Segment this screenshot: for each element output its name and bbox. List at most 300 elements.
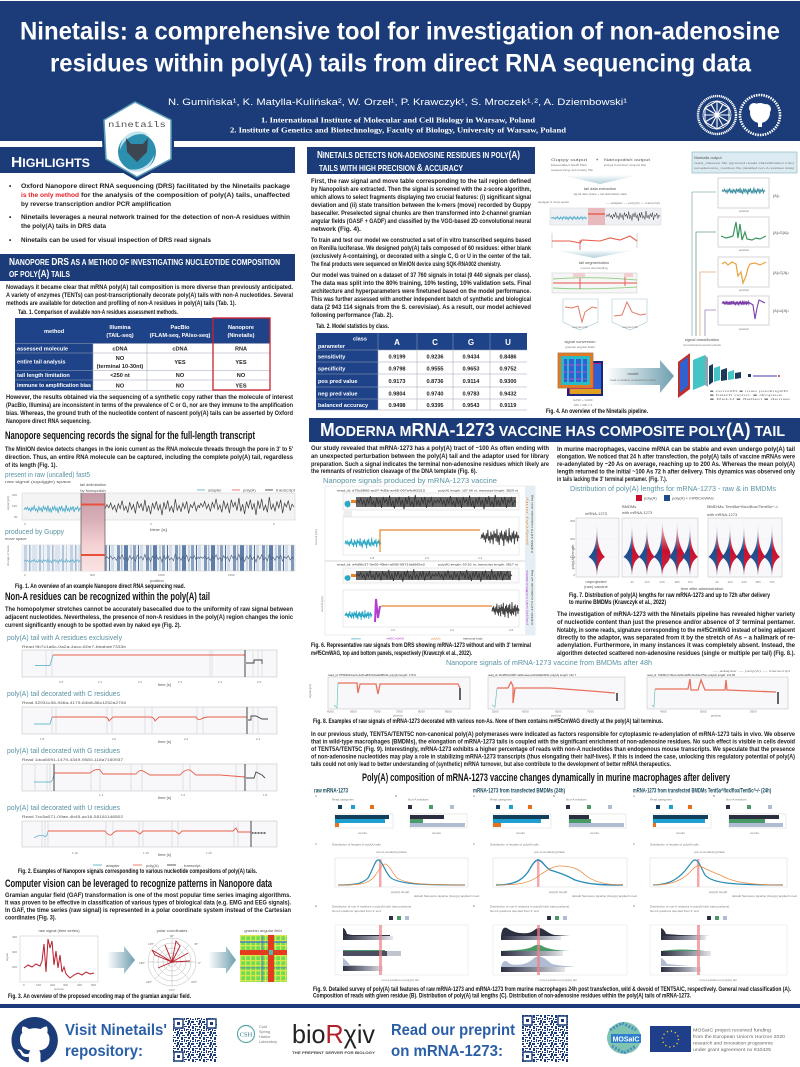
- figure 8: plot 1: read_id: ff754669-bec4-4c2f-a83f-5cfa4d08f211 poly(A) length: 176.0: [328, 673, 416, 677]
- figure 9 column: raw mRNA-1273: counts: [432, 831, 441, 835]
- table 2: sensitivity: [318, 354, 346, 360]
- affiliations: 2. Institute of Genetics and Biotechnology, Faculty of Biology, University of Warsaw, Poland: [230, 126, 567, 134]
- figure 8: plot 1: 6000: [327, 710, 334, 714]
- QR code: preprint: [522, 1015, 568, 1062]
- figure 1: read overview: adapter: [208, 488, 222, 492]
- figure 2: G residues: [7, 746, 277, 800]
- figure 6: bottom panel: current [pA]: [320, 596, 324, 612]
- figure 3: raw signal: [5, 928, 98, 991]
- table 2: 0.9434: [462, 354, 480, 360]
- figure 9 column: raw mRNA-1273: non-A position in poly(A) tail: [381, 978, 419, 982]
- text: method: angular fields (GASF + GADF) and classified by the VGG-based 2D convolutional neural: [311, 218, 531, 225]
- subheading: non-A: Non-A residues can be recognized within the poly(A) tail: [5, 591, 210, 603]
- table 2: 0.9432: [499, 392, 517, 398]
- table 1: Nanopore: [228, 325, 254, 331]
- figure 6: top panel: poly(A) length: 107.06 nt, transcript length: 3829 nt: [438, 488, 518, 492]
- pipeline: signal conversion: gramian angular fields: [565, 345, 595, 349]
- figure 7: violin plots: with mRNA-1273: [707, 512, 738, 517]
- figure 9 column: WT BMDMs: Non-A residues: [566, 798, 587, 802]
- figure 9 column: KO BMDMs: non-A-containing blank: [694, 850, 725, 854]
- figure 2: G residues: Read 1dca5091-1479-4349-9580-118a7160937: [22, 757, 124, 762]
- table 1: <250 nt: [110, 373, 130, 379]
- highlights bullet list: •: [9, 214, 12, 221]
- table 1: [15, 318, 270, 390]
- table 2: 0.9752: [499, 366, 517, 372]
- figure 2: U residues: 1.15: [143, 851, 149, 855]
- logo: IIMCB: [698, 96, 736, 134]
- text: non-A: [5, 606, 293, 629]
- table 1: RNA: [235, 346, 247, 352]
- figure 7: violin plots: 4h: [630, 580, 634, 584]
- figure 7: violin plots: poly(A) length: [570, 545, 575, 569]
- figure 3: raw signal: position: [54, 987, 64, 991]
- highlights bullet list: for the analysis of the composition of poly(A) tails, unaffected: [81, 192, 290, 199]
- logo: Cold Spring Harbor Laboratory: Spring: [259, 1030, 270, 1034]
- pipeline: signal conversion: GASF + GADF: [573, 398, 593, 402]
- ninetails output box: [692, 152, 797, 173]
- arrow: extraction to segmentation: [553, 250, 637, 258]
- arrow: signal to polar: [107, 946, 135, 974]
- heading: nanopore DRS: OF POLY(A) TAILS: [9, 269, 70, 280]
- text: macrophages: in tails lacking the 3' terminal pentamer. (Fig. 7.).: [557, 476, 667, 483]
- text: minion: [5, 446, 293, 469]
- table 2: 0.9119: [500, 403, 516, 409]
- figure 7: violin plots: unprojected: [586, 579, 606, 584]
- figure 9 column: KO BMDMs: non-A position in poly(A) tail: [699, 978, 737, 982]
- logo: Cold Spring Harbor Laboratory: Cold: [259, 1025, 267, 1029]
- results text: However, the results obtained via the sequencing of a synthetic copy rather than the molecule of interest: [6, 394, 294, 401]
- figure 3: polar coordinates: 90°: [170, 934, 175, 938]
- class plot G: position: [739, 248, 750, 252]
- table 1: NO: [176, 373, 185, 379]
- figure 6: bottom panel: 2.6: [509, 628, 514, 632]
- figure 6: raw signals: poly(A): [431, 636, 441, 640]
- pipeline: tail data extraction: squiggle & move space: [538, 200, 569, 204]
- figure 3: polar coordinates: 270°: [169, 988, 176, 992]
- figure 8: plot 1: 6500: [350, 710, 357, 714]
- figure 2: U residues: [7, 803, 277, 857]
- text: method: deviation and (ii) state transition between the k-mers (move) recorded by Guppy: [311, 202, 531, 209]
- figure 9 column: WT BMDMs: default Nanopore pipeline (Guppy) applied in text: [572, 894, 637, 898]
- funding note: research and innovation programme: [693, 1040, 774, 1046]
- figure 3: raw signal: signal: [5, 953, 9, 961]
- figure 9 column: raw mRNA-1273: counts: [358, 831, 367, 835]
- figure 1: read overview: [5, 470, 296, 583]
- figure 9 column: KO BMDMs: Read categories: [650, 798, 672, 802]
- figure 2: A residues only: time [s]: [158, 682, 171, 687]
- figure 6: bottom panel: 2.2: [450, 628, 455, 632]
- logo: bioRxiv: bioRχiv: [292, 1019, 375, 1049]
- figure 2: G residues: 1.6: [181, 793, 186, 797]
- figure 7: violin plots: 4h: [715, 580, 719, 584]
- class plot U: position: [739, 327, 750, 331]
- figure 3: raw signal: 200: [50, 983, 55, 987]
- text: GAF: It was proven to be effective in classification of various types of biological data (e.g. EMG and EEG signals).: [5, 900, 291, 906]
- pipeline: signal classification: convolutional neural network: [683, 343, 722, 347]
- figure 1: read overview: 500: [90, 573, 95, 577]
- figure 4 caption: Fig. 4. An overview of the Ninetails pipeline.: [546, 409, 648, 415]
- panel: nanopore DRS method: [0, 254, 296, 1000]
- table 2: 0.9300: [499, 379, 517, 385]
- figure 3: raw signal: 400: [12, 935, 17, 939]
- table 1: assessed molecule: [17, 346, 68, 352]
- figure 9 column: WT BMDMs: non-A-containing blank: [534, 850, 565, 854]
- figure 9 caption: Composition of reads with given residue (B). Distribution of poly(A) tail lengths (C). Distribution of non-adenosine residues within the poly(A) tails of mRNA-1273.: [313, 994, 691, 1000]
- violins: knockout BMDMs: [708, 519, 780, 576]
- class plot C: position: [739, 288, 750, 292]
- text: minion: The MinION device detects changes in the ionic current as the RNA molecule threads through the pore in 3' to 5': [5, 446, 293, 453]
- table 2: balanced accuracy: [318, 403, 369, 409]
- figure 2: C residues: poly(A) tail decorated with C residues: [7, 689, 120, 698]
- figure 9 column: KO BMDMs: default Nanopore pipeline (Guppy) applied in text: [732, 894, 797, 898]
- table 2: G: [468, 338, 474, 347]
- figure 6: top panel: [314, 488, 519, 560]
- figure 2: A residues only: 2.1: [98, 680, 103, 684]
- funding note: under grant agreement no 810425: [693, 1047, 772, 1052]
- highlights bullet list: Ninetails leverages a neural network trained for the detection of non-A residues within: [21, 214, 290, 221]
- figure 8: plot 2: 6500: [555, 710, 562, 714]
- figure 9 column: KO BMDMs: C: [633, 842, 636, 846]
- pipeline: signal conversion: [558, 339, 603, 407]
- figure 6: raw signals: transcript body: [463, 636, 483, 640]
- pipeline: tail segmentation: z-score thresholding: [580, 266, 608, 270]
- figure 6: raw signals: adapter: [351, 636, 361, 640]
- figure 2: A residues only: 2.4: [218, 680, 223, 684]
- text: minion: direction. Thus, an entire RNA molecule can be captured, including the complete poly(A) tail, regardless: [5, 454, 293, 461]
- figure 8: BMDM raw signals: [308, 658, 790, 718]
- figure 9 column: raw mRNA-1273: E: [315, 904, 317, 908]
- class plot A: [A]ₙ: [773, 193, 780, 198]
- figure 9 column: WT BMDMs: C: [473, 842, 476, 846]
- figure 7: violin plots: 100: [570, 555, 575, 559]
- results text: [6, 394, 294, 425]
- figure 8: plot 2: 6000: [522, 710, 529, 714]
- figure 3: gramian angular field: [240, 928, 287, 982]
- figure 8: BMDM raw signals: — adapter — poly(A) — transcript: [713, 669, 790, 673]
- QR code: repository: [173, 1018, 217, 1062]
- figure 7: violin plots: 12h: [727, 580, 733, 584]
- figure 7: violin plots: 300: [570, 519, 575, 523]
- pipeline: convolutional network: ■ conv2D ■ max pooling2D: [710, 389, 790, 393]
- figure 2: A residues only: 2.2: [138, 680, 143, 684]
- figure 8: plot 1: 8000: [418, 710, 425, 714]
- heading: highlights: HIGHLIGHTS: [11, 154, 90, 171]
- figure 6: raw signals: [314, 476, 535, 640]
- figure 7: violin plots: BMDMs Tent5a^flox/flox/Tent5c^-/-: [707, 504, 780, 509]
- figure 9 column: WT BMDMs: counts: [590, 831, 599, 835]
- figure 1: read overview: 0: [24, 522, 26, 526]
- figure 2: C residues: time [s]: [158, 739, 171, 744]
- figure 7: violin plots: Distribution of poly(A) lengths for mRNA-1273 - raw & in BMDMs: [570, 484, 776, 493]
- table 1: YES: [174, 360, 186, 366]
- table 1: NO: [116, 356, 125, 362]
- highlights bullet list: by reverse transcription and/or PCR amplification: [21, 201, 171, 208]
- violins: BMDMs: [624, 519, 698, 576]
- violin: unprojected: [588, 519, 605, 576]
- logo: Cold Spring Harbor Laboratory: Harbor: [259, 1035, 271, 1039]
- pipeline: convolutional network: [678, 353, 791, 401]
- figure 2 caption: Fig. 2. Examples of Nanopore signals corresponding to various nucleotide compositions of poly(A) tails.: [18, 869, 257, 875]
- table 2: parameter: [318, 344, 346, 350]
- title: Ninetails: a comprehensive tool for investigation of non-adenosine: [20, 18, 780, 46]
- figure 3: polar coordinates: 180°: [139, 961, 146, 965]
- figure 6: raw signals: mRNA-1273 molecule w/ tag: [530, 570, 534, 625]
- figure 6: raw signals: Nanopore signals produced by mRNA-1273 vaccine: [323, 476, 497, 485]
- figure 1: read overview: 150: [12, 504, 17, 508]
- heading: detection: [307, 147, 535, 174]
- results text: bias. Whereas, the ground truth of the nucleotide content of nascent poly(A) tails can be asserted by Oxford: [6, 410, 293, 417]
- table 2: 0.8486: [499, 354, 517, 360]
- figure 6: raw signals: mRNA-1273 molecule w/o tag: [530, 495, 534, 553]
- panel: moderna vaccine: [308, 418, 800, 1000]
- figure 2: G residues: poly(A) tail decorated with G residues: [7, 746, 120, 755]
- pipeline: convolutional network: ■ ReLU ■ flatten ■ dense: [710, 397, 791, 401]
- table 2: [316, 333, 527, 410]
- text: method: The data was split into the 80% training, 10% testing, 10% validation sets. Final: [311, 280, 531, 287]
- table 2: class: [353, 336, 367, 342]
- figure 9 column: WT BMDMs: counts: [516, 831, 525, 835]
- text: method: To train and test our model we constructed a set of in vitro transcribed sequins based: [311, 237, 531, 244]
- text: GAF: [5, 892, 291, 922]
- figure 2: A residues only: [7, 633, 277, 687]
- text: GAF: In GAF, the time series (raw signal) is represented in a polar coordinate system instead of the Cartesian: [5, 907, 291, 914]
- figure 9 column: raw mRNA-1273: Distribution of lengths of poly(A) tails: [332, 842, 381, 846]
- link text: repository: Visit Ninetails': [65, 1022, 167, 1039]
- figure 9 column: KO BMDMs: counts: [750, 831, 759, 835]
- text: non-A: adjacent nucleotides. Nevertheless, the presence of non-A residues in the poly(A) region changes the ionic: [5, 614, 293, 621]
- text: GAF: Gramian angular field (GAF) transformation is one of the most popular time series imaging algorithms.: [5, 892, 291, 899]
- figure 7: violin plots: poly(A) + m#f5CmWAG: [672, 496, 714, 500]
- ninetails output box: read_classes file (ignored reads classification info): [694, 161, 794, 165]
- figure 6: bottom panel: read_id: a4d9fc37-0e00-49eb-a058-0971fdd665e2: [337, 562, 425, 566]
- table 1: tail length limitation: [17, 373, 70, 379]
- figure 9 column: WT BMDMs: non-A position in poly(A) tail: [539, 978, 577, 982]
- figure 6: bottom panel: [320, 561, 525, 632]
- pipeline: tail data extraction: signal data space + tail delimitation data: [573, 192, 627, 196]
- figure 8 caption: Fig. 8. Examples of raw signals of mRNA-1273 decorated with various non-As. None of them contains m#f5CmWAG directly at the poly(A) tail terminus.: [313, 719, 663, 725]
- figure 2: A residues only: 2.5: [257, 680, 262, 684]
- figure 9 column: KO BMDMs: counts: [676, 831, 685, 835]
- pipeline: inputs: sequencing summary file: [551, 168, 593, 172]
- pipeline: segments: [563, 299, 647, 330]
- figure 2 legend: transcript: [184, 863, 201, 868]
- text: GAF: coordinates (Fig. 3).: [5, 914, 56, 922]
- figure 9 column: raw mRNA-1273: Non-A residues: [408, 798, 429, 802]
- pipeline: tail data extraction: — adapter — poly(A) — transcript: [606, 201, 660, 205]
- subheading: computer vision: Computer vision can be leveraged to recognize patterns in Nanopore data: [5, 878, 273, 890]
- table 1: immune to amplification bias: [17, 383, 91, 389]
- pipeline: segments: segment #2: [622, 325, 638, 329]
- figure 8: plot 2: position: [551, 714, 562, 718]
- figure 2 legend: poly(A): [146, 863, 159, 868]
- table 2: 0.9395: [426, 403, 444, 409]
- figure 9 column: raw mRNA-1273: Distribution of non-A residues in poly(A) tails (raw positions): [332, 904, 411, 908]
- figure 4: ninetails pipeline: [538, 152, 797, 415]
- logo: Cold Spring Harbor Laboratory: [238, 1025, 277, 1044]
- figure 8: plot 1: signal [pA]: [308, 684, 312, 698]
- table 1: method: [44, 329, 65, 335]
- class plot C: [718, 257, 789, 292]
- figure 7: violin plots: 24h: [659, 580, 665, 584]
- table 2: C: [432, 338, 438, 347]
- figure 8: plot 3: position: [711, 714, 722, 718]
- table 1: NO: [116, 384, 125, 390]
- table 2: A: [394, 338, 400, 347]
- table 1: PacBio: [171, 325, 190, 331]
- figure 2: U residues: 1.10: [72, 851, 78, 855]
- figure 7: violin plots: (raw) vaccine: [584, 584, 609, 589]
- figure 9 column: raw mRNA-1273: Read categories: [332, 798, 354, 802]
- text: method: (exclusively A-containing), or decorated with a single C, G or U in the center of the tail.: [311, 253, 531, 260]
- figure 7: violin plots: mRNA-1273: [585, 511, 608, 516]
- table 1: NO: [176, 384, 185, 390]
- figure 9 column: WT BMDMs: B: [553, 794, 555, 798]
- heading: detection: TAILS WITH HIGH PRECISION & ACCURACY: [319, 163, 463, 174]
- figure 2 legend: [93, 863, 201, 868]
- figure 9 column: WT BMDMs: [473, 788, 637, 982]
- figure 2: A residues only: Read 9b7c1a6c-0a2a-4acc-60e7-bbabde7333e: [22, 644, 127, 649]
- text: method: First, the raw signal and move table corresponding to the tail region defined: [311, 178, 531, 185]
- figure 7: violin plots: 24h: [741, 580, 747, 584]
- table 1: Illumina: [109, 325, 131, 331]
- figure 3: raw signal: 400: [77, 983, 82, 987]
- pipeline: convolutional network: ■ batch norm. ■ dropout: [710, 393, 782, 397]
- arrow: model: model: [628, 371, 639, 376]
- logo: Cold Spring Harbor Laboratory: Laboratory: [259, 1040, 277, 1044]
- figure 9 column: WT BMDMs: Distribution of lengths of poly(A) tails: [490, 842, 539, 846]
- figure 2: U residues: 1.20: [206, 851, 212, 855]
- text: study: preparation. Such a signal indicates the terminal non-adenosine residues which likely are: [311, 461, 549, 468]
- panel: highlights: [0, 147, 295, 244]
- highlights bullet list: •: [9, 183, 12, 190]
- figure 9 column: KO BMDMs: D: [633, 904, 636, 908]
- text: method: The final products were sequenced on MinION device using SQK-RNA002 chemistry.: [311, 261, 501, 268]
- text: macrophages: [557, 446, 795, 483]
- figure 1: read overview: 1000: [158, 573, 165, 577]
- arrow: model: feed-in dataset (pretrained model): [610, 378, 656, 382]
- text: previous study: tails could not only lead to better understanding of (synthetic) mRNA turnover, but also contribute to the development of better mRNA therapeutics.: [311, 761, 671, 768]
- figure 8: plot 3: 5500: [750, 710, 757, 714]
- pipeline: inputs: polya function output file: [604, 163, 646, 167]
- figure 9 column: WT BMDMs: E: [473, 904, 475, 908]
- figure 6 caption: m#f5CmWAG, top and bottom panels, respectively (Krawczyk et al., 2022).: [311, 651, 472, 657]
- figure 1 caption: Fig. 1. An overview of an example Nanopore direct RNA sequencing read.: [15, 584, 185, 590]
- text: study: an unexpected perturbation between the poly(A) tail and the adaptor used for library: [311, 453, 549, 460]
- table 1: entire tail analysis: [17, 360, 66, 366]
- figure 7: violin plots: [570, 484, 782, 591]
- pipeline: signal classification: signal classification: [685, 337, 719, 342]
- table 1: cDNA: [172, 346, 188, 352]
- heading: nanopore DRS: NANOPORE DRS AS A METHOD OF INVESTIGATING NUCLEOTIDE COMPOSITION: [9, 257, 280, 268]
- figure 2: G residues: 1.4: [99, 793, 104, 797]
- authors: N. Gumińska¹, K. Matylla-Kulińska², W. Orzeł¹, P. Krawczyk¹, S. Mroczek¹˒², A. Dziembowski¹: [168, 97, 627, 108]
- figure 3: raw signal: 200: [12, 965, 17, 969]
- text: study: the remnants of restriction cleavage of the DNA template (Fig. 6).: [311, 468, 477, 475]
- figure 8: plot 2: read_id: 2fcd5f3d-6087-4a93-aeee-b9c2a8a20bbc poly(A) length: 142.7: [488, 673, 576, 677]
- figure 9 column: WT BMDMs: Distribution of non-A residues in poly(A) tails (raw positions): [490, 904, 569, 908]
- figure 9 column: raw mRNA-1273: C: [315, 842, 318, 846]
- figure 1: read overview: 200: [12, 493, 17, 497]
- figure 9 column: WT BMDMs: A: [473, 794, 475, 798]
- figure 2 legend: adapter: [106, 863, 120, 868]
- figure 1: read overview: 0: [24, 573, 26, 577]
- logo: Faculty of Biology: [740, 95, 780, 135]
- figure 9 column: raw mRNA-1273: B: [395, 794, 397, 798]
- table 2: 0.9783: [462, 392, 480, 398]
- figure 1: read overview: position: [150, 578, 164, 583]
- figure 2: C residues: 2.4: [256, 737, 261, 741]
- figure 2: G residues: 1.8: [263, 793, 268, 797]
- table 2: 0.9804: [388, 392, 406, 398]
- figure 6: top panel: current [pA]: [314, 529, 318, 545]
- highlights bullet list: •: [9, 237, 12, 244]
- title: [20, 18, 780, 78]
- figure 7: violin plots: 72h: [769, 580, 775, 584]
- results text: (PacBio, Illumina) are inconsistent in terms of the prevalence of C or G, nor are they immune to the amplification: [6, 402, 293, 409]
- figure 1: read overview: move space: [5, 536, 27, 541]
- table 2: specificity: [318, 366, 346, 372]
- title: residues within poly(A) tails from direct RNA sequencing data: [50, 50, 752, 78]
- figure 3: raw signal: 100: [36, 983, 41, 987]
- figure 6: raw signals: poly(A) only: [525, 495, 529, 545]
- logo: MOSaIC: MOSaIC: [613, 1036, 639, 1044]
- text: non-A: The homopolymer stretches cannot be accurately basecalled due to the uniformity of raw signal between: [5, 606, 293, 613]
- figure 9 column: raw mRNA-1273: poly(A) length: [391, 890, 410, 894]
- ninetails output box: nonadenosine_residues file (detailed non-A residues data): [694, 166, 794, 170]
- funding note: [693, 1028, 786, 1052]
- figure 1: read overview: 5: [273, 522, 275, 526]
- figure 3: gramian angular field: gramian angular field: [244, 928, 282, 933]
- table 2: 0.9199: [388, 354, 406, 360]
- arrow: model: [606, 360, 674, 393]
- funding note: from the European Union's Horizon 2020: [693, 1034, 786, 1039]
- figure 8: plot 1: [308, 673, 470, 718]
- figure 3 caption: Fig. 3. An overview of the proposed encoding map of the gramian angular field.: [8, 994, 191, 1000]
- table 1: (Ninetails): [227, 333, 255, 339]
- figure 6: bottom panel: 2.0: [391, 628, 396, 632]
- pipeline: inputs: Guppy output: [551, 157, 588, 162]
- figure 3: polar coordinates: 315°: [191, 980, 198, 984]
- subheading: full-length signal: Nanopore sequencing records the signal for the full-length transcript: [5, 430, 255, 442]
- figure 9 column: raw mRNA-1273: default Nanopore pipeline (Guppy) applied in text: [414, 894, 479, 898]
- figure 9 column: raw mRNA-1273: Non-A positions reported from 3' end: [332, 909, 381, 913]
- figure 2: G residues: time [s]: [158, 795, 171, 800]
- text: method: which allows to select fragments displaying two crucial features: (i) significant signal: [310, 194, 531, 201]
- highlights bullet list: Ninetails can be used for visual inspection of DRS read signals: [21, 237, 211, 244]
- figure 9 column: WT BMDMs: mRNA-1273 from transfected BMDMs (24h): [473, 788, 565, 794]
- figure 8: plot 2: 5500: [492, 710, 499, 714]
- intro text: Nowadays it became clear that mRNA poly(A) tail composition is more diverse than previously anticipated.: [6, 284, 293, 291]
- table 2: 0.9798: [388, 366, 406, 372]
- link text: preprint: [391, 1022, 516, 1060]
- figure 3: polar coordinates: 0°: [198, 961, 202, 965]
- pipeline: tail data extraction: tail data extraction: [584, 186, 616, 191]
- figure 8: plot 2: [488, 673, 625, 718]
- table 2: pos pred value: [318, 379, 357, 385]
- figure 6: top panel: 2.4: [478, 556, 483, 560]
- heading: moderna: MODERNA MRNA-1273 VACCINE HAS COMPOSITE POLY(A) TAIL: [320, 420, 785, 440]
- figure 3: polar coordinates: 135°: [148, 942, 155, 946]
- text: study: [311, 445, 549, 475]
- highlights bullet list: is the only method: [21, 192, 79, 199]
- text: method: basecaller. Preselected signal chunks are then transformed into 2-channel gramian: [311, 210, 531, 217]
- figure 3: polar coordinates: 45°: [194, 942, 199, 946]
- figure 2: C residues: Read 32931c36-946a-4179-84b8-86c1252a2706: [22, 700, 127, 705]
- logo: Cold Spring Harbor Laboratory: CSH: [240, 1032, 253, 1038]
- highlights bullet list: Oxford Nanopore direct RNA sequencing (DRS) facilitated by the Ninetails package: [21, 183, 290, 190]
- figure 1: read overview: produced by Guppy: [5, 527, 64, 536]
- figure 9 column: KO BMDMs: Distribution of non-A residues in poly(A) tails (raw positions): [650, 904, 729, 908]
